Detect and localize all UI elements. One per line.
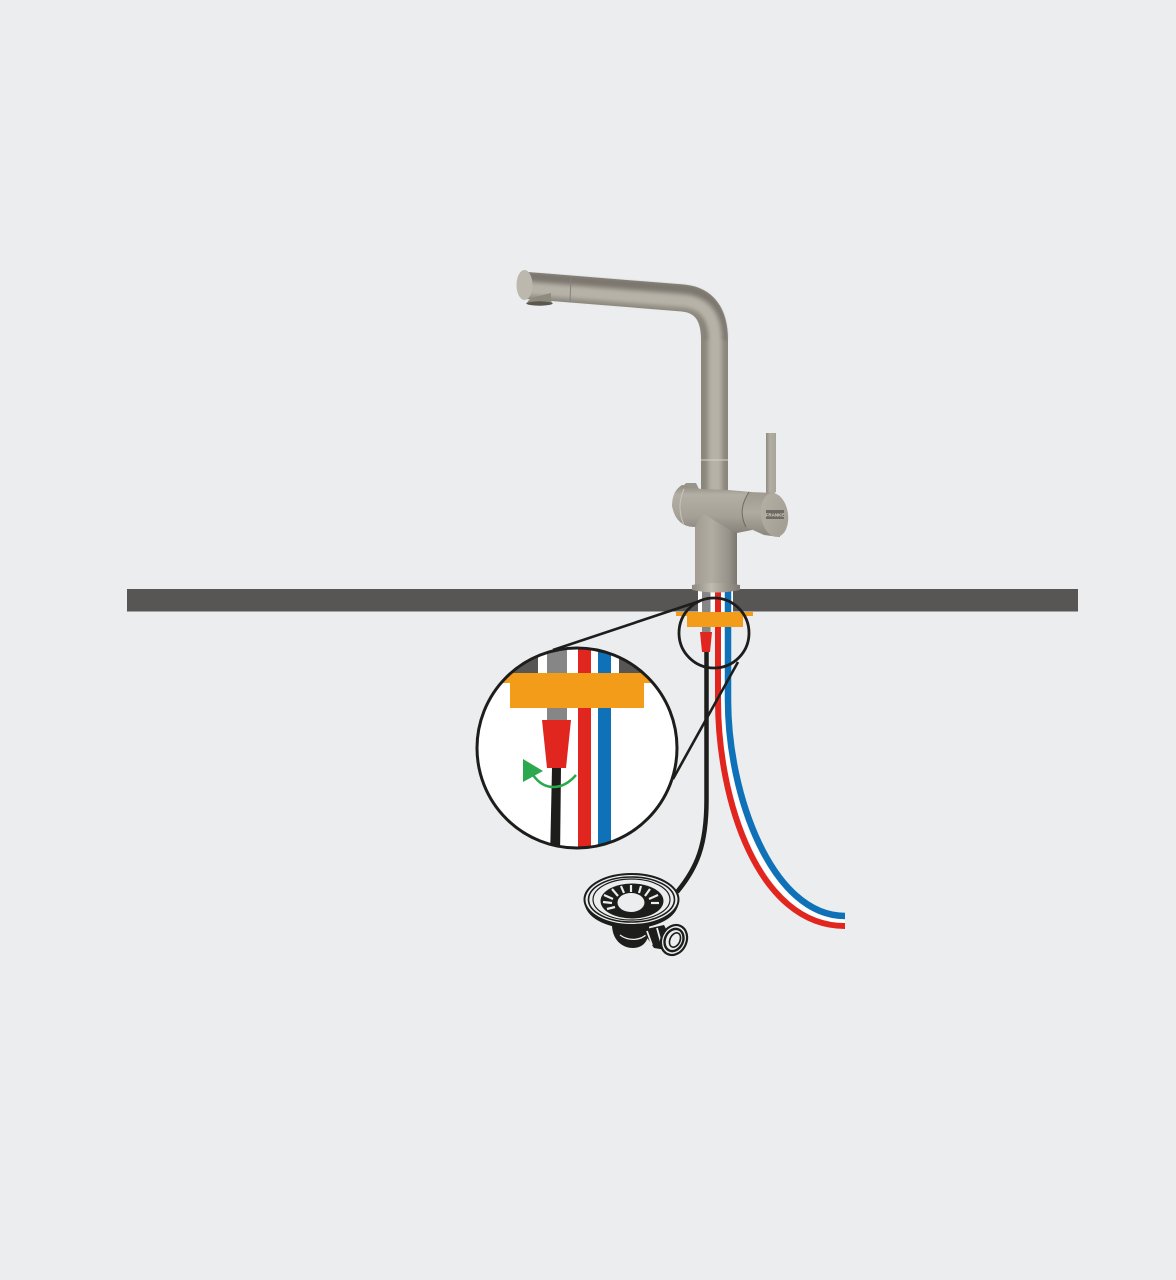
top button: [682, 483, 699, 489]
pull-out spout seam: [570, 277, 571, 302]
faucet: [516, 270, 791, 592]
neck junction: [695, 513, 737, 560]
drain outlet fitting: [642, 921, 692, 959]
magnified red connector: [542, 720, 571, 768]
brand plate: FRANKE: [766, 512, 784, 518]
brand plate: [766, 510, 784, 519]
mounting bracket (orange): [676, 612, 753, 627]
drain bowl: [612, 926, 649, 948]
end cap: [758, 491, 791, 539]
right cylinder: [742, 492, 780, 537]
lever handle: [766, 433, 776, 497]
left end seam: [680, 489, 684, 525]
green rotation arrow: [523, 759, 576, 787]
magnified bracket: [503, 673, 651, 708]
sink drain strainer illustration: [584, 874, 692, 959]
spout tip: [516, 270, 532, 300]
drain cable (black) with red connector: [677, 632, 712, 892]
horizontal body: [672, 485, 752, 533]
strainer rim: [584, 876, 678, 928]
magnified black cable: [550, 768, 561, 846]
cylinder seam: [742, 492, 749, 527]
base flange: [692, 583, 740, 592]
strainer basket: [600, 884, 664, 918]
riser seam: [701, 459, 728, 461]
magnified detail circle: [476, 646, 678, 850]
strainer centre knob: [615, 892, 647, 915]
hot water hose (red): [718, 590, 845, 926]
base column: [695, 525, 737, 587]
aerator: [526, 293, 553, 304]
zoom callout: connecting lines and small circle: [553, 598, 749, 779]
spout and riser: [527, 284, 716, 495]
cold water hose (blue): [728, 590, 845, 916]
countertop: [127, 589, 1078, 612]
supply hoses and hole through countertop: [698, 590, 845, 926]
